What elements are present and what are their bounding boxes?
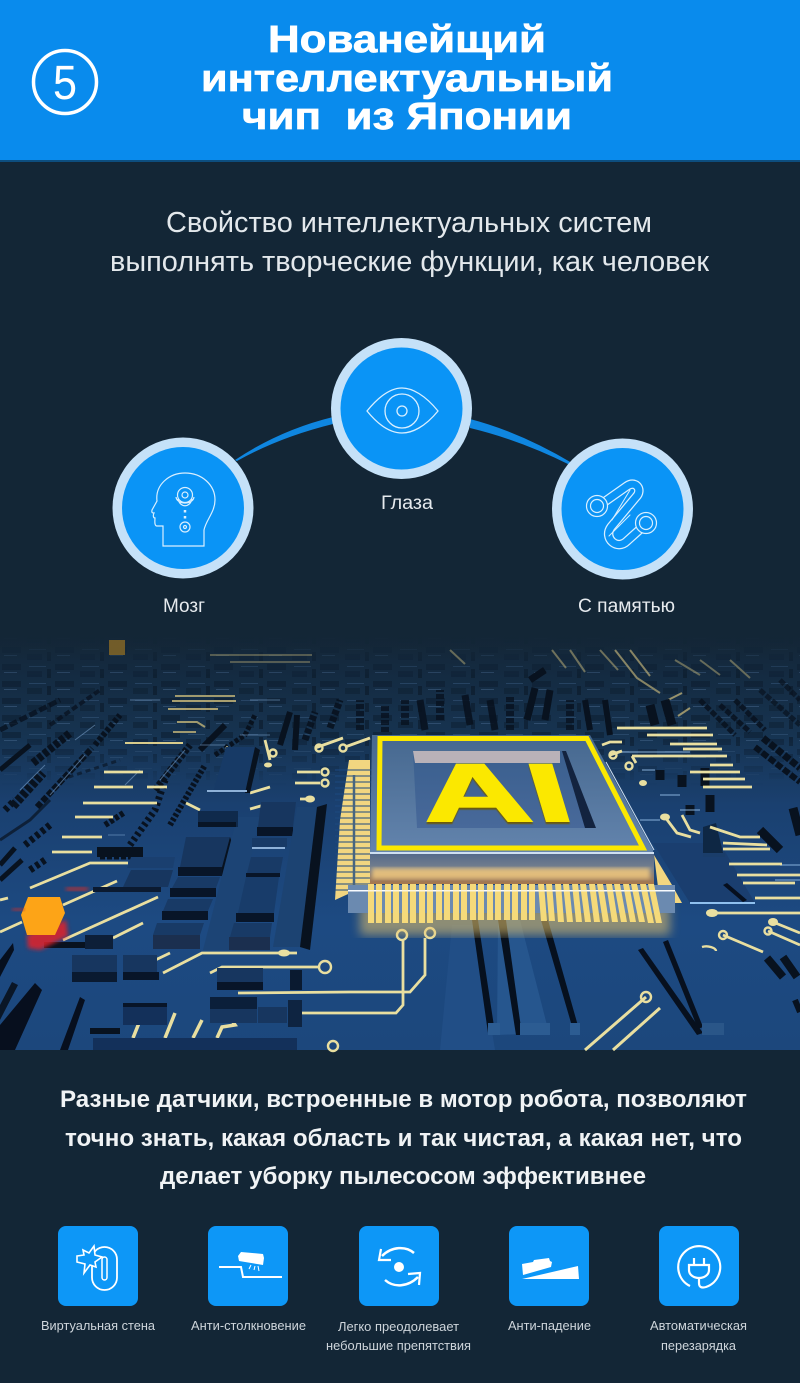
label: перезарядка: [661, 1338, 737, 1353]
label: Автоматическая: [650, 1318, 747, 1333]
title: чип из Японии: [242, 96, 572, 138]
label: небольшие препятствия: [326, 1338, 471, 1353]
node: eyes: [331, 338, 472, 514]
label: Виртуальная стена: [41, 1318, 156, 1333]
subtitle: [110, 207, 710, 278]
AI lettering: I: [516, 746, 582, 839]
base plate: [348, 885, 675, 913]
AI chip: [335, 735, 682, 935]
distant traces: [125, 650, 750, 743]
description text: [60, 1086, 747, 1190]
right area components: [360, 670, 800, 1035]
description text: Разные датчики, встроенные в мотор робота, позволяют: [60, 1086, 747, 1113]
right traces: [585, 728, 800, 1050]
icon: number 5 badge: 5: [53, 57, 77, 110]
left traces: [0, 738, 425, 1038]
label: Анти-падение: [508, 1318, 591, 1333]
feature: anti-drop: [508, 1226, 591, 1333]
label: brain: Мозг: [163, 596, 205, 617]
description text: делает уборку пылесосом эффективнее: [160, 1163, 646, 1190]
component blocks left: [0, 747, 327, 1050]
label: [650, 1318, 747, 1353]
connector arcs: [235, 417, 572, 465]
front pins: [368, 884, 662, 923]
icon: robot on slope: [522, 1258, 579, 1279]
title: интеллектуальный: [201, 58, 613, 100]
feature: obstacle climbing: [326, 1226, 471, 1353]
subtitle: Свойство интеллектуальных систем: [166, 207, 652, 239]
icon: robot on ledge: [219, 1252, 282, 1277]
slabs under chip: [440, 920, 580, 1050]
header band: [0, 0, 800, 162]
feature: virtual wall: [41, 1226, 156, 1333]
icon: linked rings: [586, 484, 656, 545]
description text: точно знать, какая область и так чистая, а какая нет, что: [65, 1125, 742, 1152]
icon: eye: [367, 388, 438, 433]
icon: number 5 badge: [34, 50, 96, 114]
orange hexagon: [12, 640, 125, 950]
chip top face: [370, 735, 653, 853]
glow: [360, 905, 670, 935]
icon: collision: [77, 1246, 117, 1290]
label: Легко преодолевает: [338, 1319, 459, 1334]
yellow frame: [379, 738, 643, 848]
chip side: [370, 853, 654, 884]
icon: rotation arrows: [379, 1248, 420, 1285]
node: memory: [552, 438, 693, 617]
icon: plug: [678, 1246, 720, 1288]
title: [201, 19, 613, 138]
subtitle: выполнять творческие функции, как человек: [110, 246, 710, 278]
label: eyes: Глаза: [381, 493, 433, 514]
white diagonal chip edge: [606, 762, 654, 850]
AI lettering: A: [413, 747, 537, 838]
left pins: [335, 760, 370, 900]
label: memory: С памятью: [578, 596, 675, 617]
title: Нованейщий: [268, 19, 546, 61]
label: [326, 1319, 471, 1353]
feature: anti-collision: [191, 1226, 306, 1333]
right pins: [654, 855, 682, 903]
feature: auto recharge: [650, 1226, 747, 1353]
icon: head: [152, 473, 215, 546]
circuit board image: [0, 628, 800, 1051]
recess: [413, 751, 595, 828]
left dark clusters: [0, 690, 340, 880]
node: brain: [112, 438, 254, 617]
label: Анти-столкновение: [191, 1318, 306, 1333]
